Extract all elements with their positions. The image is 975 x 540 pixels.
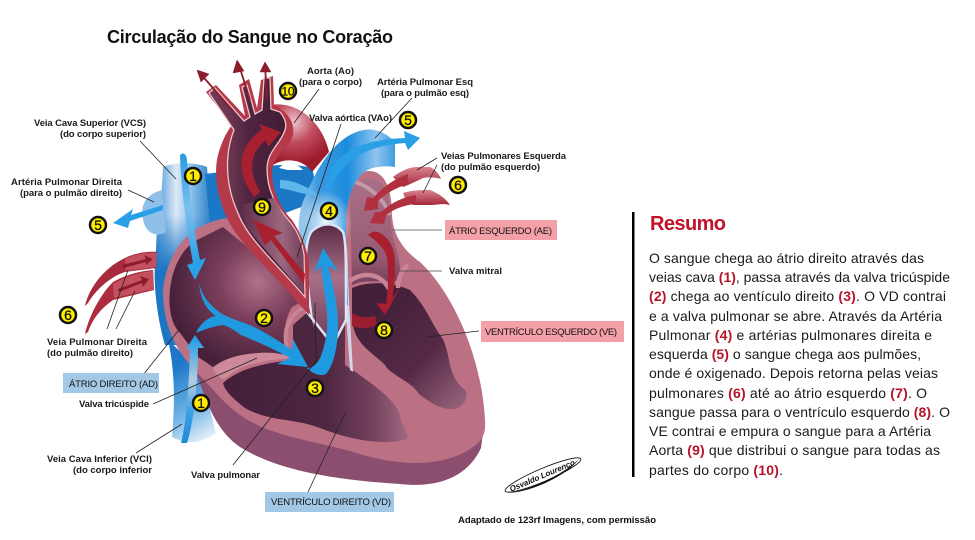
label box: Átrio Direito	[63, 373, 159, 393]
label: Veia Cava Inferior: (do corpo inferior	[73, 465, 152, 476]
resumo heading: Resumo	[650, 213, 726, 235]
resumo text: O sangue chega ao átrio direito através das	[649, 250, 924, 266]
left pulmonary veins	[393, 167, 450, 205]
inferior vena cava	[168, 340, 216, 442]
resumo text: veias cava (1), passa através da valva tricúspide	[649, 269, 950, 285]
label: Valva pulmonar: Valva pulmonar	[191, 470, 260, 481]
label: Artéria Pulmonar Direita: (para o pulmão direito)	[20, 188, 122, 199]
marker numbers: 6	[454, 177, 462, 193]
label: Valva tricúspide: Valva tricúspide	[79, 399, 149, 410]
label: Aorta: Aorta (Ao)	[307, 66, 354, 77]
lower aorta lighter area	[240, 198, 304, 294]
label: Veia Cava Inferior: Veia Cava Inferior (VCI)	[47, 454, 152, 465]
left ventricle chamber	[352, 283, 467, 409]
resumo text: (2) chega ao ventículo direito (3). O VD contrai	[649, 288, 946, 304]
leader lines	[107, 89, 479, 492]
vena cava superior	[155, 163, 214, 345]
blue vessel behind aorta	[205, 165, 320, 230]
label: Artéria Pulmonar Esq	[377, 77, 473, 99]
label: Veia Pulmonar Direita: (do pulmão direito)	[47, 348, 133, 359]
arrow 2	[196, 283, 308, 367]
label: Veia Cava Superior	[34, 118, 146, 140]
credit: Adaptado de 123rf Imagens, com permissão	[458, 515, 656, 526]
cross artery arrow	[280, 180, 321, 197]
right ventricle chamber	[223, 310, 408, 442]
pulmonary trunk	[299, 130, 395, 310]
marker numbers: 5	[94, 217, 102, 233]
signature	[503, 453, 584, 499]
marker numbers: 8	[380, 322, 388, 338]
heart illustration	[85, 60, 485, 485]
marker numbers: 4	[325, 203, 333, 219]
marker numbers: 1	[197, 395, 205, 411]
arrow 1 inferior	[181, 335, 204, 443]
pulmonary valve spike	[305, 285, 314, 328]
label: Veia Cava Inferior	[47, 454, 152, 476]
label: Artéria Pulmonar Direita: Artéria Pulmonar Direita	[11, 177, 123, 188]
resumo text: partes do corpo (10).	[649, 462, 783, 478]
marker numbers	[64, 84, 462, 411]
label box: Átrio Direito: ÁTRIO DIREITO (AD)	[69, 379, 158, 390]
marker numbers: 5	[404, 112, 412, 128]
label: Veias Pulmonares Esquerda: (do pulmão esquerdo)	[441, 162, 540, 173]
arrow 8 tail	[352, 313, 377, 328]
resumo text: pulmonares (6) até ao átrio esquerdo (7). O	[649, 385, 927, 401]
right pulmonary veins	[85, 252, 157, 334]
marker numbers: 1	[189, 168, 197, 184]
heart body shadow band	[193, 362, 484, 485]
numbered markers	[60, 83, 466, 411]
arrow lower left atrium	[370, 195, 416, 224]
marker numbers: 9	[258, 199, 266, 215]
septum strip	[345, 245, 353, 372]
label: Artéria Pulmonar Direita	[11, 177, 123, 199]
label box: Átrio Esquerdo: ÁTRIO ESQUERDO (AE)	[449, 226, 552, 237]
label: Aorta	[299, 66, 362, 88]
arrow 9 upper	[241, 124, 281, 197]
red arrows	[241, 124, 416, 328]
pulmonary trunk interior	[306, 224, 346, 345]
blue arrows	[113, 131, 420, 443]
left atrium interior	[350, 178, 400, 285]
label: Veia Cava Superior: Veia Cava Superior (VCS)	[34, 118, 146, 129]
label: Veias Pulmonares Esquerda: Veias Pulmonares Esquerda	[441, 151, 567, 162]
label: Artéria Pulmonar Esq: Artéria Pulmonar Esq	[377, 77, 473, 88]
label box: Ventrículo Esquerdo: VENTRÍCULO ESQUERDO (VE)	[485, 327, 617, 338]
resumo text: VE contrai e empura o sangue para a Artéria	[649, 423, 931, 439]
title: Circulação do Sangue no Coração	[107, 27, 393, 47]
marker numbers: 3	[311, 380, 319, 396]
arrow 5 right	[326, 131, 420, 190]
marker numbers: 2	[260, 310, 268, 326]
label: Valva mitral: Valva mitral	[449, 266, 502, 277]
label: Valva aórtica: Valva aórtica (VAo)	[309, 113, 392, 124]
marker numbers: 6	[64, 307, 72, 323]
arrow 7	[368, 232, 400, 315]
resumo text	[649, 250, 950, 478]
arrow 3 and 4 pulmonary trunk	[307, 248, 338, 375]
label box: Ventrículo Direito	[265, 492, 394, 512]
label: Veia Pulmonar Direita: Veia Pulmonar Direita	[47, 337, 148, 348]
panel: resumo	[649, 213, 950, 478]
marker numbers: 10	[282, 84, 295, 98]
resumo text: esquerda (5) o sangue chega aos pulmões,	[649, 346, 921, 362]
divider	[632, 212, 634, 477]
ascending aorta interior	[209, 78, 305, 297]
white notch under arch	[279, 163, 303, 170]
label: Veias Pulmonares Esquerda	[441, 151, 567, 173]
resumo text: sangue passa para o ventrículo esquerdo (8). O	[649, 404, 950, 420]
label: Aorta: (para o corpo)	[299, 77, 362, 88]
arrow 1 superior	[180, 154, 206, 280]
aorta outer wall with branches	[206, 76, 309, 315]
arrow upper left atrium	[364, 174, 408, 211]
tricuspid valve flap	[213, 353, 293, 379]
resumo text: Pulmonar (4) e artérias pulmonares direita e	[649, 327, 932, 343]
right atrium chamber	[169, 227, 305, 367]
label box: Átrio Esquerdo	[445, 220, 557, 240]
red arrow tips on aorta branches	[197, 60, 271, 110]
signature: Osvaldo Lourenço	[508, 458, 576, 494]
marker numbers: 7	[364, 248, 372, 264]
label: Artéria Pulmonar Esq: (para o pulmão esq)	[381, 88, 469, 99]
pulmonary valve flaps	[286, 285, 347, 353]
mitral valve flaps	[350, 265, 408, 289]
label box: Ventrículo Direito: VENTRÍCULO DIREITO (VD)	[271, 497, 391, 508]
label box: Ventrículo Esquerdo	[481, 321, 624, 342]
heart body	[163, 171, 485, 463]
arrow 9 lower	[253, 220, 305, 284]
arrow 5 left	[113, 205, 163, 228]
resumo text: e a valva pulmonar se abre. Através da Artéria	[649, 308, 942, 324]
label: Veia Cava Superior: (do corpo superior)	[60, 129, 146, 140]
resumo text: onde é oxigenado. Depois retorna pelas veias	[649, 365, 938, 381]
aortic arch	[264, 104, 329, 172]
right pulmonary artery	[142, 190, 166, 234]
resumo text: Aorta (9) que distribui o sangue para todas as	[649, 442, 940, 458]
label: Veia Pulmonar Direita	[47, 337, 148, 359]
